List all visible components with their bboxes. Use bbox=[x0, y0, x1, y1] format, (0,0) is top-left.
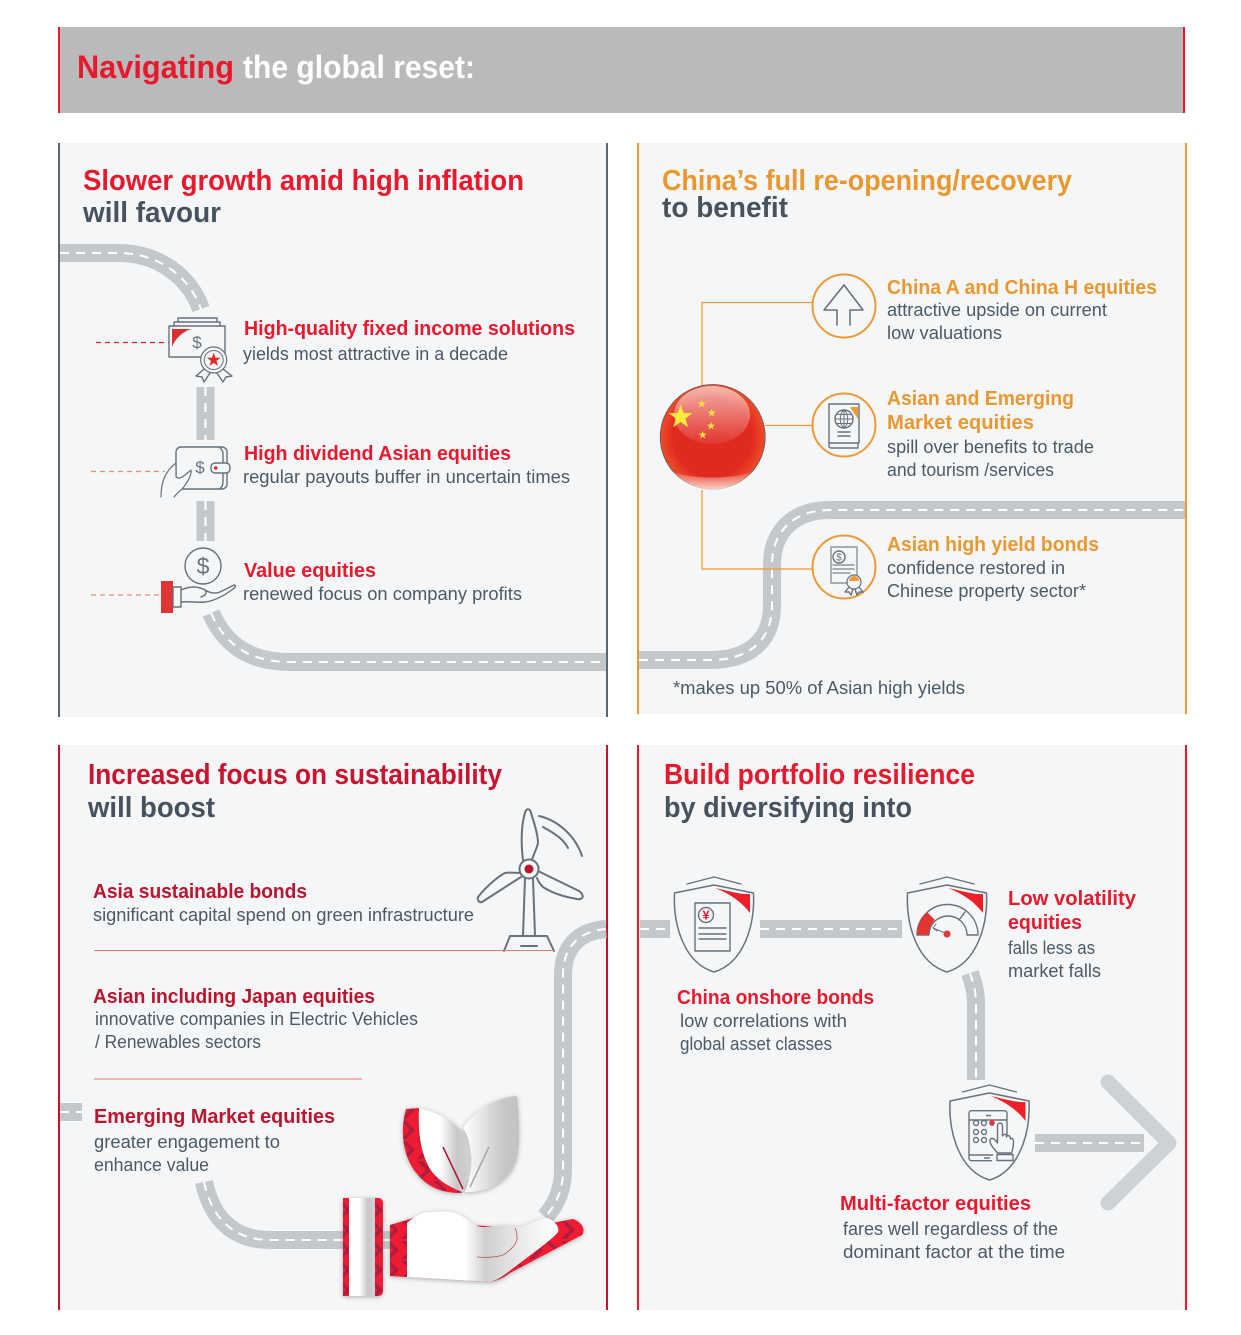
item: Asian and EM: Market equities bbox=[887, 412, 1034, 434]
item: sustainable bonds bbox=[93, 881, 474, 925]
item: low volatility: Low volatility bbox=[1008, 888, 1137, 910]
item: value bbox=[243, 560, 522, 604]
icon: hand bbox=[343, 1198, 584, 1296]
icon: leaves bbox=[403, 1096, 519, 1193]
item: China A and H: low valuations bbox=[887, 323, 1002, 343]
icon: China flag sphere bbox=[660, 384, 765, 490]
item: China onshore: low correlations with bbox=[680, 1011, 847, 1031]
icon: shield with yuan document bbox=[674, 877, 754, 972]
heading bbox=[662, 165, 1072, 224]
item: high yield: Asian high yield bonds bbox=[887, 534, 1099, 556]
item: EM equities bbox=[94, 1106, 335, 1175]
icon: coin over hand bbox=[91, 548, 235, 613]
heading bbox=[664, 759, 975, 824]
panel: slower growth bbox=[58, 143, 608, 717]
icon: wallet in hand: $ bbox=[195, 458, 205, 477]
item: multi-factor: fares well regardless of the bbox=[843, 1219, 1058, 1239]
heading: will favour bbox=[82, 197, 221, 229]
icon: bond certificate: $ bbox=[836, 552, 842, 564]
item: Asian incl Japan: / Renewables sectors bbox=[95, 1032, 261, 1052]
item: value: Value equities bbox=[244, 560, 376, 582]
heading: Build portfolio resilience bbox=[664, 759, 975, 791]
item: Asian and EM: Asian and Emerging bbox=[887, 388, 1074, 410]
heading: by diversifying into bbox=[664, 792, 912, 824]
connector lines bbox=[702, 302, 812, 569]
icon: certificate and cash: $ bbox=[192, 333, 202, 352]
heading: will boost bbox=[87, 792, 215, 824]
item: Asian and EM: and tourism /services bbox=[887, 460, 1054, 480]
item: dividend: High dividend Asian equities bbox=[244, 443, 511, 465]
item: EM equities: greater engagement to bbox=[94, 1132, 280, 1152]
panel: portfolio resilience bbox=[637, 745, 1187, 1310]
item: fixed income: High-quality fixed income solutions bbox=[244, 318, 575, 340]
heading bbox=[82, 165, 524, 229]
arrow head bbox=[1108, 1082, 1169, 1203]
icon: coin over hand: $ bbox=[197, 553, 210, 579]
item: Asian incl Japan: Asian including Japan equities bbox=[93, 986, 375, 1008]
header banner bbox=[58, 27, 1185, 113]
icon: wind turbine bbox=[478, 809, 583, 951]
item: Asian incl Japan bbox=[93, 986, 418, 1052]
item: Asian and EM: spill over benefits to trade bbox=[887, 437, 1094, 457]
item: EM equities: enhance value bbox=[94, 1155, 209, 1175]
item: China A and H bbox=[887, 277, 1157, 343]
item: high yield: confidence restored in bbox=[887, 558, 1065, 578]
item: multi-factor: Multi-factor equities bbox=[840, 1193, 1031, 1215]
road bbox=[639, 510, 1185, 660]
panel: sustainability bbox=[58, 745, 608, 1310]
item: China onshore: China onshore bonds bbox=[677, 987, 874, 1009]
item: low volatility: equities bbox=[1008, 912, 1082, 934]
icon: up arrow bbox=[812, 274, 876, 338]
item: China onshore: global asset classes bbox=[680, 1034, 832, 1054]
item: Asian incl Japan: innovative companies in Electric Vehicles bbox=[95, 1009, 418, 1029]
item: Asian and EM bbox=[887, 388, 1094, 480]
heading: Increased focus on sustainability bbox=[88, 759, 502, 791]
item: multi-factor: dominant factor at the time bbox=[843, 1242, 1065, 1262]
item: EM equities: Emerging Market equities bbox=[94, 1106, 335, 1128]
icon: shield with gauge bbox=[907, 877, 987, 972]
icon: certificate and cash bbox=[96, 318, 232, 382]
heading bbox=[87, 759, 502, 824]
item: sustainable bonds: significant capital spend on green infrastructure bbox=[93, 905, 474, 925]
icon: wallet in hand bbox=[91, 447, 230, 497]
icon: shield with yuan document: ¥ bbox=[702, 908, 710, 922]
item: multi-factor bbox=[840, 1193, 1065, 1262]
road bbox=[60, 929, 606, 1240]
title: the global reset: bbox=[243, 49, 475, 85]
road bbox=[640, 929, 1144, 1143]
item: China onshore bbox=[677, 987, 874, 1054]
item: dividend bbox=[243, 443, 570, 487]
item: value: renewed focus on company profits bbox=[243, 584, 522, 604]
icon: bond certificate bbox=[812, 536, 876, 598]
heading: to benefit bbox=[662, 192, 788, 224]
item: low volatility: falls less as bbox=[1008, 938, 1095, 958]
item: low volatility: market falls bbox=[1008, 961, 1101, 981]
heading: Slower growth amid high inflation bbox=[83, 165, 524, 197]
item: dividend: regular payouts buffer in uncertain times bbox=[243, 467, 570, 487]
item: high yield bbox=[887, 534, 1099, 601]
item: sustainable bonds: Asia sustainable bonds bbox=[93, 881, 307, 903]
item: fixed income bbox=[243, 318, 575, 364]
road bbox=[60, 253, 606, 662]
title: Navigating bbox=[77, 49, 234, 85]
panel: China re-opening bbox=[637, 143, 1187, 714]
item: fixed income: yields most attractive in a decade bbox=[243, 344, 508, 364]
item: China A and H: attractive upside on current bbox=[887, 300, 1107, 320]
heading: China’s full re-opening/recovery bbox=[662, 165, 1072, 197]
icon: shield with tablet bbox=[950, 1085, 1029, 1180]
item: low volatility bbox=[1008, 888, 1137, 981]
item: China A and H: China A and China H equities bbox=[887, 277, 1157, 299]
icon: passport bbox=[812, 394, 876, 456]
item: high yield: Chinese property sector* bbox=[887, 581, 1086, 601]
footnote: *makes up 50% of Asian high yields bbox=[673, 678, 965, 698]
